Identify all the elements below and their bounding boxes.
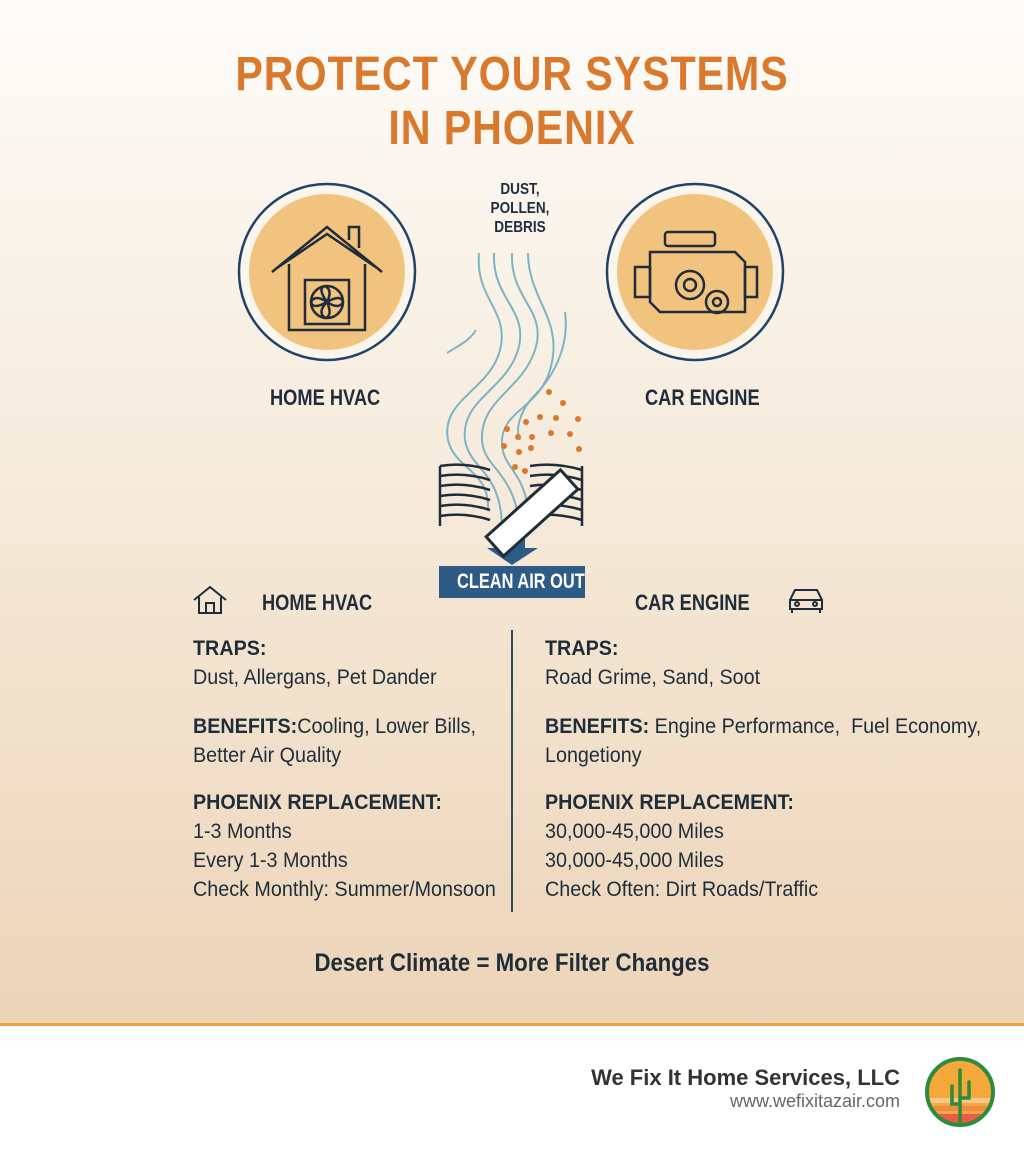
label: dust pollen debris: DUST, xyxy=(500,181,540,198)
icon: small house xyxy=(193,586,227,614)
heading: car engine: CAR ENGINE xyxy=(635,590,750,615)
text block: home hvac details: PHOENIX REPLACEMENT: xyxy=(193,791,442,814)
divider xyxy=(511,630,513,912)
website: www.wefixitazair.com xyxy=(730,1091,900,1111)
text block: car engine details: Road Grime, Sand, Soot xyxy=(545,666,760,689)
diagram: airflow through filter xyxy=(438,252,584,565)
text block: car engine details: 30,000-45,000 Miles xyxy=(545,820,724,843)
text block: home hvac details: Better Air Quality xyxy=(193,744,341,767)
text block: car engine details: 30,000-45,000 Miles xyxy=(545,849,724,872)
text block: home hvac details: 1-3 Months xyxy=(193,820,292,843)
summary text: Desert Climate = More Filter Changes xyxy=(314,949,710,977)
label box: clean air out: CLEAN AIR OUT xyxy=(457,570,585,593)
label: dust pollen debris: DEBRIS xyxy=(494,219,546,236)
icon: home hvac circle xyxy=(238,182,416,362)
text block: car engine details: Check Often: Dirt Roads/Traffic xyxy=(545,878,818,901)
text block: car engine details xyxy=(545,637,981,901)
title xyxy=(235,48,789,155)
icon: small car xyxy=(789,589,823,613)
label: dust pollen debris xyxy=(491,181,549,236)
text block: home hvac details: Check Monthly: Summer/Monsoon xyxy=(193,878,496,901)
label: dust pollen debris: POLLEN, xyxy=(491,200,549,217)
text block: home hvac details: Dust, Allergans, Pet Dander xyxy=(193,666,437,689)
text block: home hvac details: BENEFITS:Cooling, Lower Bills, xyxy=(193,715,476,738)
label box: clean air out xyxy=(439,566,585,598)
text block: car engine details: TRAPS: xyxy=(545,637,618,660)
label: home hvac: HOME HVAC xyxy=(270,385,380,410)
label: car engine: CAR ENGINE xyxy=(645,385,760,410)
text block: car engine details: Longetiony xyxy=(545,744,642,767)
company name: We Fix It Home Services, LLC xyxy=(591,1065,900,1090)
text block: car engine details: BENEFITS: Engine Performance, Fuel Economy, xyxy=(545,715,981,738)
title: PROTECT YOUR SYSTEMS xyxy=(235,48,789,101)
title: IN PHOENIX xyxy=(388,102,636,155)
text block: home hvac details xyxy=(193,637,496,901)
icon: car engine circle xyxy=(606,182,784,362)
footer line xyxy=(0,1023,1024,1026)
logo: cactus xyxy=(925,1057,995,1127)
text block: home hvac details: TRAPS: xyxy=(193,637,266,660)
text block: car engine details: PHOENIX REPLACEMENT: xyxy=(545,791,794,814)
text block: home hvac details: Every 1-3 Months xyxy=(193,849,348,872)
heading: home hvac: HOME HVAC xyxy=(262,590,372,615)
